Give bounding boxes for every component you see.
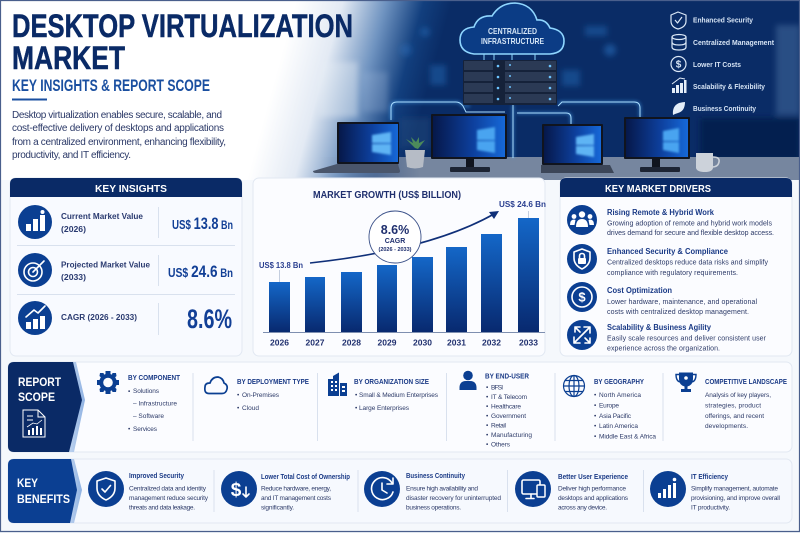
by end-user: Retail xyxy=(491,422,507,430)
driver: enhanced security: Enhanced Security & Compliance xyxy=(607,247,729,256)
driver: rising remote work: drives demand for secure and flexible desktop access. xyxy=(607,230,774,237)
driver: scalability: Easily scale resources and deliver consistent user xyxy=(607,336,767,342)
bar chart: 2027 xyxy=(306,338,325,348)
benefit: IT efficiency xyxy=(650,471,781,512)
intro paragraph: from a centralized environment, enhancing flexibility, xyxy=(12,137,226,148)
driver: cost optimization: $ xyxy=(578,290,586,304)
driver: cost optimization: Cost Optimization xyxy=(607,286,672,295)
server rack xyxy=(463,60,557,105)
by geography: • xyxy=(594,413,597,420)
by component: Solutions xyxy=(133,388,160,395)
benefit: IT efficiency: provisioning, and improve overall xyxy=(691,495,781,502)
by component: – Infrastructure xyxy=(133,400,177,408)
by component: • xyxy=(128,388,131,396)
insight: current market value: US$ 13.8 Bn xyxy=(172,214,233,233)
insight: CAGR: 8.6% xyxy=(187,304,232,334)
plant xyxy=(405,137,425,168)
benefit list: hero: Lower IT Costs xyxy=(693,60,741,69)
driver: enhanced security: Centralized desktops reduce data risks and simplify xyxy=(607,260,768,266)
CAGR callout: (2026 - 2033) xyxy=(378,247,412,253)
laptop left xyxy=(313,122,400,173)
by organization size: Large Enterprises xyxy=(359,405,410,412)
by end-user: • xyxy=(486,384,489,392)
by end-user: • xyxy=(486,422,489,430)
intro paragraph: cost-effective delivery of desktops and applications xyxy=(12,123,224,134)
benefit: improved security: threats and data leakage. xyxy=(129,504,195,512)
benefit: lower total cost: $ xyxy=(231,480,242,501)
CAGR callout: CAGR xyxy=(385,238,405,245)
by deployment type: • xyxy=(237,405,240,412)
by geography: Latin America xyxy=(599,423,638,430)
cloud: centralized infrastructure: INFRASTRUCTURE xyxy=(481,36,544,46)
by geography: • xyxy=(594,402,597,410)
benefit: lower total cost: Lower Total Cost of Ownership xyxy=(261,474,350,481)
panel: key insights xyxy=(10,178,242,356)
insight: projected market value xyxy=(18,253,233,287)
title: MARKET xyxy=(12,40,125,76)
by geography: Europe xyxy=(599,402,619,410)
icon: dollar coin: $ xyxy=(676,60,682,70)
by component: • xyxy=(128,426,131,433)
laptop right xyxy=(541,124,614,173)
key benefits tab xyxy=(8,459,82,523)
by organization size: Small & Medium Enterprises xyxy=(359,392,439,399)
key benefits tab: BENEFITS xyxy=(17,492,70,506)
by end-user xyxy=(460,371,532,448)
benefit: lower total cost: Reduce hardware, energy, xyxy=(261,486,331,492)
by component xyxy=(97,371,181,433)
insight: CAGR xyxy=(18,301,232,335)
benefit: better user experience xyxy=(515,471,629,512)
drivers header xyxy=(560,178,792,197)
benefit: business continuity: Ensure high availability and xyxy=(406,486,478,492)
benefit: business continuity xyxy=(364,471,501,512)
bar chart: 2030 xyxy=(413,338,432,348)
by end-user: Manufacturing xyxy=(491,432,532,439)
coffee cup xyxy=(696,153,719,172)
icon: database xyxy=(672,34,686,50)
subtitle: KEY INSIGHTS & REPORT SCOPE xyxy=(12,77,210,95)
by component: – Software xyxy=(133,413,164,420)
by deployment type: On-Premises xyxy=(242,392,280,399)
benefit: business continuity: disaster recovery for uninterrupted xyxy=(406,495,501,502)
benefit: lower total cost: significantly. xyxy=(261,504,294,512)
by geography: • xyxy=(594,434,597,440)
intro paragraph: productivity, and IT efficiency. xyxy=(12,150,131,161)
insight: CAGR: CAGR (2026 - 2033) xyxy=(61,313,137,322)
driver: cost optimization: costs with centralized desktop management. xyxy=(607,309,749,316)
by geography: • xyxy=(594,423,597,430)
benefit: improved security: Improved Security xyxy=(129,473,184,480)
insight: projected market value: US$ 24.6 Bn xyxy=(168,262,233,281)
driver: scalability xyxy=(567,320,767,352)
benefit list: hero: Business Continuity xyxy=(693,104,757,113)
by organization size: • xyxy=(355,392,358,399)
by geography xyxy=(564,376,656,440)
benefit: improved security: Centralized data and identity xyxy=(129,486,207,492)
by component: BY COMPONENT xyxy=(128,375,181,382)
competitive landscape: COMPETITIVE LANDSCAPE xyxy=(705,379,787,386)
title xyxy=(12,8,353,76)
bar chart: 2028 xyxy=(342,338,361,348)
by organization size: • xyxy=(355,405,358,412)
panel: market growth chart xyxy=(253,178,546,356)
cloud: centralized infrastructure xyxy=(460,3,564,60)
monitor left xyxy=(431,114,507,172)
key insights header xyxy=(10,178,242,197)
by geography: • xyxy=(594,392,597,399)
by end-user: • xyxy=(486,413,489,420)
value label 2026: US$ 13.8 Bn xyxy=(259,260,303,270)
by organization size xyxy=(328,372,439,412)
title: DESKTOP VIRTUALIZATION xyxy=(12,8,353,44)
icon: leaf xyxy=(673,102,685,115)
benefit: business continuity: Business Continuity xyxy=(406,473,465,480)
growth arrow xyxy=(310,211,499,263)
key insights header: KEY INSIGHTS xyxy=(95,183,167,195)
by geography: Middle East & Africa xyxy=(599,434,656,440)
monitor right xyxy=(624,117,690,172)
bar chart: 2029 xyxy=(378,338,397,348)
benefit: lower total cost xyxy=(221,471,350,512)
by deployment type: BY DEPLOYMENT TYPE xyxy=(237,379,309,386)
by end-user: Government xyxy=(491,413,526,420)
competitive landscape xyxy=(676,372,787,430)
report scope tab: SCOPE xyxy=(18,390,55,404)
by end-user: Healthcare xyxy=(491,404,521,410)
by end-user: • xyxy=(486,442,489,448)
bar chart: 2026 xyxy=(270,338,289,348)
benefit: lower total cost: and IT management costs xyxy=(261,495,332,502)
by end-user: • xyxy=(486,404,489,410)
benefit: better user experience: across any device. xyxy=(558,504,607,512)
insight: current market value: (2026) xyxy=(61,225,86,234)
benefit: business continuity: business operations. xyxy=(406,504,461,512)
insight: projected market value: (2033) xyxy=(61,273,86,282)
by end-user: • xyxy=(486,394,489,401)
benefit: IT efficiency: IT productivity. xyxy=(691,504,730,512)
by end-user: BY END-USER xyxy=(485,374,529,380)
benefit list: hero: Enhanced Security xyxy=(693,16,754,24)
by deployment type: Cloud xyxy=(242,405,259,412)
drivers header: KEY MARKET DRIVERS xyxy=(605,183,711,195)
cloud: centralized infrastructure: CENTRALIZED xyxy=(488,26,537,36)
bar chart xyxy=(263,211,545,348)
panel: key market drivers xyxy=(560,178,792,356)
by end-user: • xyxy=(486,432,489,439)
bar chart: 2033 xyxy=(519,338,538,348)
CAGR callout: 8.6% xyxy=(381,223,409,237)
CAGR callout xyxy=(369,211,421,263)
by deployment type xyxy=(205,377,309,412)
by geography: Asia Pacific xyxy=(599,413,632,420)
competitive landscape: Analysis of key players, xyxy=(705,392,771,399)
desk surface xyxy=(320,157,800,180)
driver: rising remote work xyxy=(567,205,774,237)
by component: Services xyxy=(133,426,158,433)
benefit: better user experience: Better User Experience xyxy=(558,474,628,481)
panel: report scope xyxy=(8,362,792,452)
competitive landscape: offerings, and recent xyxy=(705,413,764,420)
connection lines xyxy=(391,102,640,158)
benefit: IT efficiency: Simplify management, automate xyxy=(691,486,778,492)
benefit list: hero xyxy=(671,12,774,115)
intro paragraph xyxy=(12,110,226,161)
report scope tab: REPORT xyxy=(18,375,62,389)
by end-user: IT & Telecom xyxy=(491,394,527,401)
benefit: IT efficiency: IT Efficiency xyxy=(691,474,728,481)
insight: current market value: Current Market Value xyxy=(61,212,144,221)
intro paragraph: Desktop virtualization enables secure, scalable, and xyxy=(12,110,222,121)
driver: cost optimization: Lower hardware, maintenance, and operational xyxy=(607,299,757,306)
driver: rising remote work: Rising Remote & Hybrid Work xyxy=(607,208,715,217)
by organization size: BY ORGANIZATION SIZE xyxy=(354,379,429,386)
driver: scalability: experience across the organization. xyxy=(607,346,720,352)
by geography: BY GEOGRAPHY xyxy=(594,379,644,386)
chart title: MARKET GROWTH (US$ BILLION) xyxy=(313,189,461,201)
report scope tab xyxy=(8,362,85,452)
driver: enhanced security: compliance with regulatory requirements. xyxy=(607,270,738,277)
by geography: North America xyxy=(599,392,641,399)
competitive landscape: strategies, product xyxy=(705,402,761,410)
driver: enhanced security xyxy=(567,244,768,277)
by end-user: BFSI xyxy=(491,384,503,392)
value label 2033: US$ 24.6 Bn xyxy=(499,199,546,209)
insight: projected market value: Projected Market Value xyxy=(61,260,151,270)
benefit list: hero: Centralized Management xyxy=(693,38,774,47)
icon: growth chart xyxy=(672,78,686,93)
driver: cost optimization xyxy=(567,282,757,316)
insight: current market value xyxy=(18,205,233,239)
bar chart: 2032 xyxy=(482,338,501,348)
benefit: better user experience: desktops and applications xyxy=(558,495,629,502)
by deployment type: • xyxy=(237,392,240,399)
bar chart: 2031 xyxy=(447,338,466,348)
competitive landscape: developments. xyxy=(705,423,748,430)
benefit: improved security: management reduce security xyxy=(129,495,209,502)
by end-user: Others xyxy=(491,442,511,448)
icon: shield check xyxy=(671,12,686,29)
driver: rising remote work: Growing adoption of remote and hybrid work models xyxy=(607,220,772,228)
hero banner: centralized infrastructure scene xyxy=(0,0,800,180)
benefit: better user experience: Deliver high performance xyxy=(558,486,626,492)
driver: scalability: Scalability & Business Agility xyxy=(607,323,712,332)
benefit list: hero: Scalability & Flexibility xyxy=(693,82,766,91)
key benefits tab: KEY xyxy=(17,476,38,490)
benefit: improved security xyxy=(88,471,209,512)
panel: key benefits xyxy=(8,459,792,523)
